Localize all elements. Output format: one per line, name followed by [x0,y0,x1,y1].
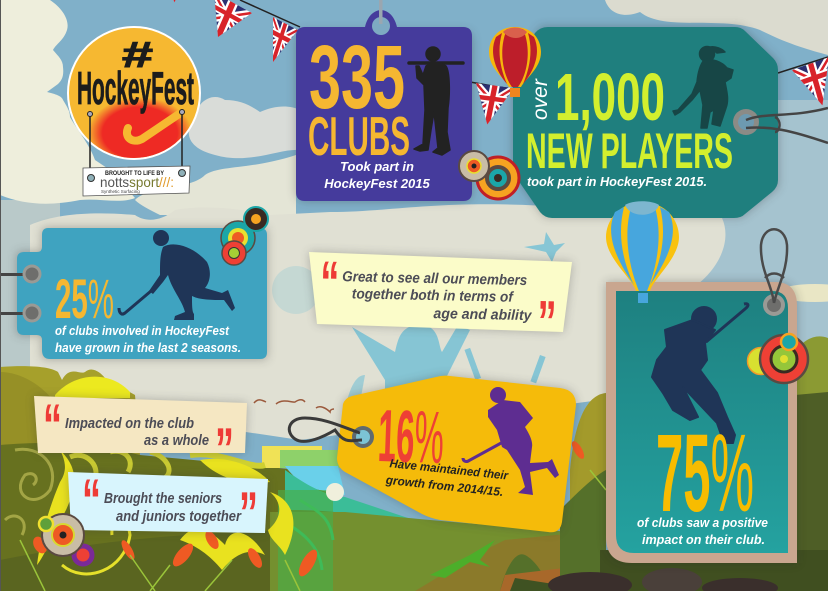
quote: impacted on the club: “ [43,392,62,459]
quote: great to see: age and ability [433,306,533,324]
panel: 25% tag: have grown in the last 2 seasons. [55,340,241,355]
sponsor sign [83,166,190,196]
silhouette: lunging player [652,304,748,443]
quote: great to see: Great to see all our members [342,269,527,289]
eyelets and strings [1,273,31,276]
cloud: behind logo right [189,97,300,158]
eyelet and string [352,426,374,448]
logo: HockeyFest: Synthetic Surfacing [101,189,140,194]
crowd silhouettes [272,232,565,440]
flag: union jack top 3 [261,17,298,68]
eyelet and string [763,294,785,316]
logo: HockeyFest [68,27,200,196]
panel: 75% card: impact on their club. [642,532,765,547]
panel: 335 clubs tag: HockeyFest 2015 [324,176,431,191]
quote: brought the seniors: “ [82,467,101,534]
quote: great to see: together both in terms of [352,286,515,306]
quote: brought the seniors: and juniors together [116,509,242,525]
decorative circles: lower left [39,514,92,564]
caption: Have maintained their [389,456,510,483]
silhouette: running player [463,387,559,495]
silhouette: female player [673,46,733,128]
logo: HockeyFest: BROUGHT TO LIFE BY [105,171,164,177]
panel: 16% tag [289,376,576,532]
stones [548,572,632,591]
quote: impacted on the club: Impacted on the club [65,416,194,432]
number 75%: 75% [656,412,754,535]
quote: impacted on the club: ” [215,416,234,483]
word CLUBS: CLUBS [308,105,410,167]
hockey stick in logo [127,114,179,141]
panel: 25% tag [1,228,267,359]
number 1,000: 1,000 [555,60,665,135]
flourishes [62,451,265,574]
sign strings [88,110,184,176]
cloud: below logo [135,155,296,215]
left olive hills [0,366,140,462]
flag: union jack top 1 [166,0,184,3]
balloon: blue and yellow [606,201,679,303]
ground centre [270,512,606,591]
caption [384,456,510,500]
text: HockeyFest [77,62,194,114]
caption: Took part in [340,159,414,174]
flag: union jack right [792,57,828,112]
eyelet and string [733,109,759,135]
quote: impacted on the club [34,392,247,483]
panel: new players tag [513,27,828,218]
caption: growth from 2014/15. [384,473,504,499]
tag hole and string [372,17,390,35]
quote: brought the seniors: Brought the seniors [104,491,222,507]
central colour bands [262,446,322,468]
quote: impacted on the club: as a whole [144,433,209,449]
left page edge [0,0,1,591]
decorative circles: 25% tag [221,207,268,265]
decorative circles: near 335 tag [459,151,519,199]
bunting strings [240,0,828,90]
cloud: upper left cream [0,0,135,204]
quote: great to see: ” [537,288,557,356]
caption: took part in HockeyFest 2015. [527,174,707,189]
logo: HockeyFest: nottssport///: [100,174,174,190]
number 335: 335 [309,28,405,128]
panel: 75% card [606,229,797,563]
panel: 335 clubs tag [296,0,472,201]
quote: great to see: “ [319,249,340,316]
hash: # [122,34,153,75]
balloon: red and yellow [489,27,541,97]
word over: over [529,78,552,120]
band: mid grey cloud [30,204,725,440]
flag: union jack near balloon [468,83,514,127]
caption: of clubs saw a positive [637,515,768,530]
cloud: upper right [605,0,828,55]
number 25%: 25% [55,267,114,330]
silhouette: player bending [119,230,235,320]
quote: brought the seniors: ” [239,480,258,547]
birds [254,400,334,412]
quote: great to see [309,249,572,356]
quote: brought the seniors [68,467,268,547]
right hills [570,393,606,591]
decorative circles: 75% card [748,334,808,383]
silhouette: standing player [408,47,464,155]
number 16%: 16% [377,394,445,479]
flag: union jack top 2 [199,0,252,47]
caption: of clubs involved in HockeyFest [55,323,230,338]
